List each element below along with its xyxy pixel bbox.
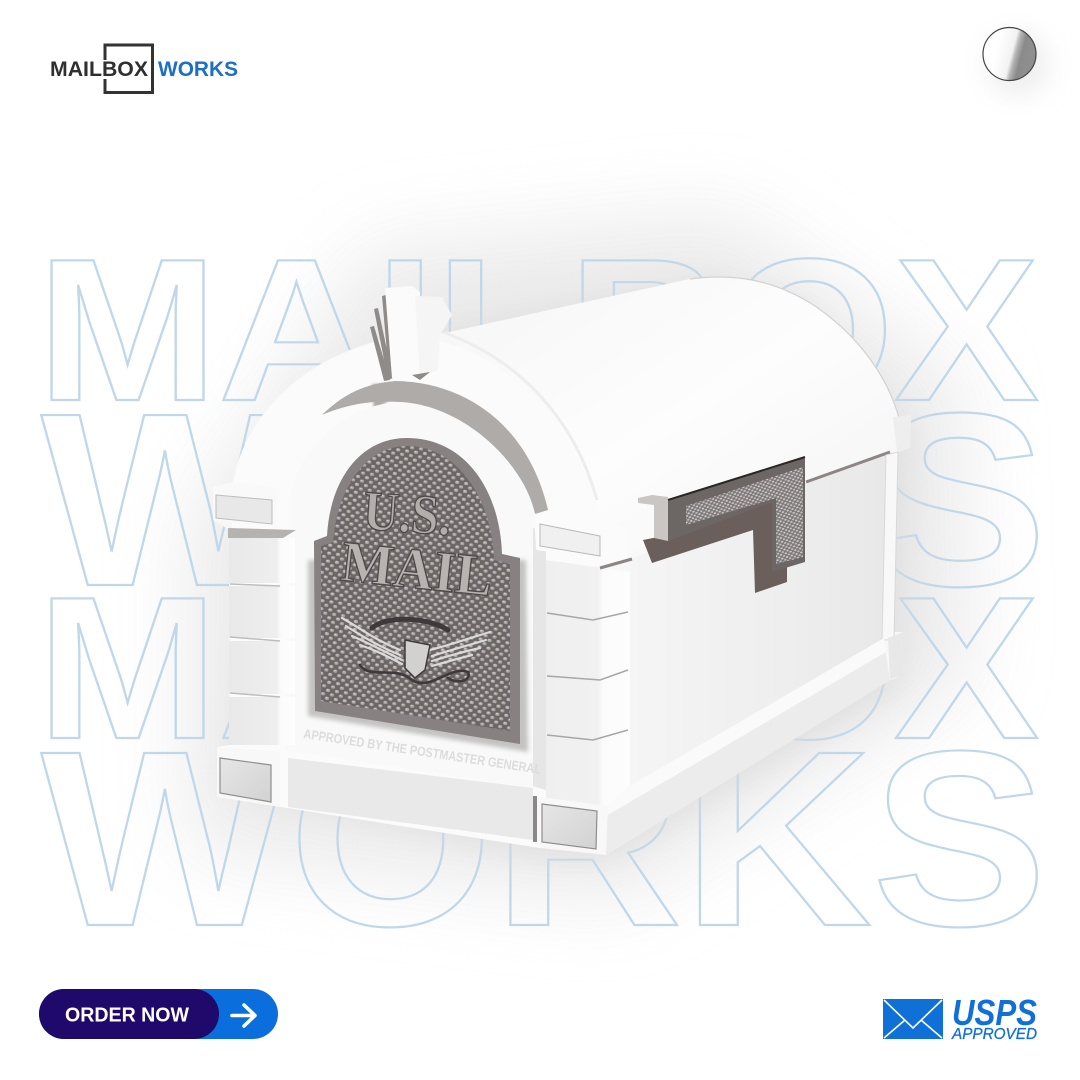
plaque side strip — [533, 528, 546, 790]
logo wordmark works: WORKS — [158, 58, 238, 81]
plaque frame — [314, 438, 520, 744]
eagle emblem — [342, 618, 490, 683]
logo square — [105, 45, 152, 92]
flag pebbled inlay — [686, 467, 803, 564]
mailbox silhouette — [213, 277, 911, 855]
left foot panel — [220, 758, 271, 802]
button navy pill — [39, 989, 219, 1039]
right foot panel — [542, 804, 597, 849]
swatch disc — [983, 28, 1036, 80]
arch edge shading — [445, 333, 597, 500]
us text: U.S. — [361, 480, 453, 548]
eagle right wing — [430, 632, 490, 666]
arch inner shadow crescent — [322, 381, 548, 514]
right cap block — [534, 512, 628, 562]
base plinth top highlight — [606, 638, 886, 816]
right foot — [535, 796, 608, 855]
left cap shadow — [228, 528, 296, 541]
envelope icon — [883, 999, 943, 1039]
button label: ORDER NOW — [65, 1004, 189, 1026]
soft shadow glow behind mailbox — [190, 215, 970, 900]
button arrow — [232, 1005, 255, 1026]
flag L plate — [668, 457, 805, 572]
fan white blades — [385, 286, 420, 378]
left cap face — [216, 495, 272, 524]
rear upper tab — [893, 415, 911, 452]
mailbox contact shadow — [225, 280, 912, 860]
inner front recess — [285, 402, 545, 790]
plaque pebble field — [321, 446, 510, 731]
front plinth — [217, 747, 608, 855]
outline word: WORKS row 1: WORKS — [41, 362, 1047, 638]
fan shadow — [372, 384, 404, 412]
outline word: MAILBOX row 2: MAILBOX — [37, 555, 1039, 782]
side panel — [630, 455, 886, 785]
eagle body shield — [405, 640, 430, 678]
colour swatch: chrome — [983, 28, 1048, 94]
fan metal sticks — [370, 295, 393, 381]
rear lower tab — [888, 632, 903, 679]
flag top edge — [668, 457, 805, 500]
button: order now — [39, 989, 278, 1039]
lid seam — [806, 452, 890, 482]
brick seams — [230, 584, 280, 697]
fan foot marks — [412, 372, 430, 380]
flag bracket — [638, 495, 668, 541]
brick seams — [547, 612, 628, 740]
left foot — [217, 747, 280, 806]
badge: USPS approved — [883, 992, 1037, 1043]
envelope folds — [884, 1000, 942, 1038]
plaque shadow — [308, 560, 528, 752]
flag shadow — [643, 502, 787, 593]
outline word: MAILBOX row 1: MAILBOX — [37, 217, 1039, 444]
envelope body — [883, 999, 943, 1039]
postmaster engraving: APPROVED BY THE POSTMASTER GENERAL — [303, 726, 542, 777]
usps wordmark: USPS — [952, 992, 1037, 1033]
front face — [218, 337, 606, 848]
plinth face — [288, 758, 533, 840]
deco fan ornament — [370, 286, 452, 381]
plaque with pebbled metal — [314, 438, 520, 744]
right cap face — [540, 524, 600, 556]
eagle ribbon — [360, 665, 469, 683]
recess shadow post — [533, 796, 537, 842]
right bricks face — [546, 560, 630, 808]
logo: Mailbox Works — [50, 45, 238, 92]
mailbox dome lid — [445, 277, 899, 566]
brick 4 — [229, 697, 295, 745]
background outline lettering — [37, 217, 1047, 978]
eagle left wing — [342, 618, 402, 664]
approved wordmark: APPROVED — [951, 1026, 1037, 1043]
rear strip — [882, 452, 898, 640]
left cap block — [213, 482, 278, 526]
brick 1 — [229, 538, 295, 583]
base plinth side — [606, 642, 890, 855]
brick 3 — [229, 641, 295, 694]
dome rear rim — [690, 277, 899, 418]
fan side blade — [415, 296, 452, 377]
mail flag — [638, 457, 805, 593]
mailbox illustration — [213, 277, 911, 855]
button blue track — [39, 989, 278, 1039]
right brick column — [534, 512, 632, 808]
eagle banner — [372, 619, 448, 630]
swatch shadow — [988, 34, 1048, 94]
right cap seam — [600, 559, 632, 568]
outline word: WORKS row 2: WORKS — [41, 699, 1047, 978]
logo wordmark mailbox: MAILBOX — [50, 58, 148, 81]
mail text: MAIL — [338, 528, 496, 609]
brick 2 — [229, 586, 295, 638]
left brick column — [213, 482, 296, 745]
